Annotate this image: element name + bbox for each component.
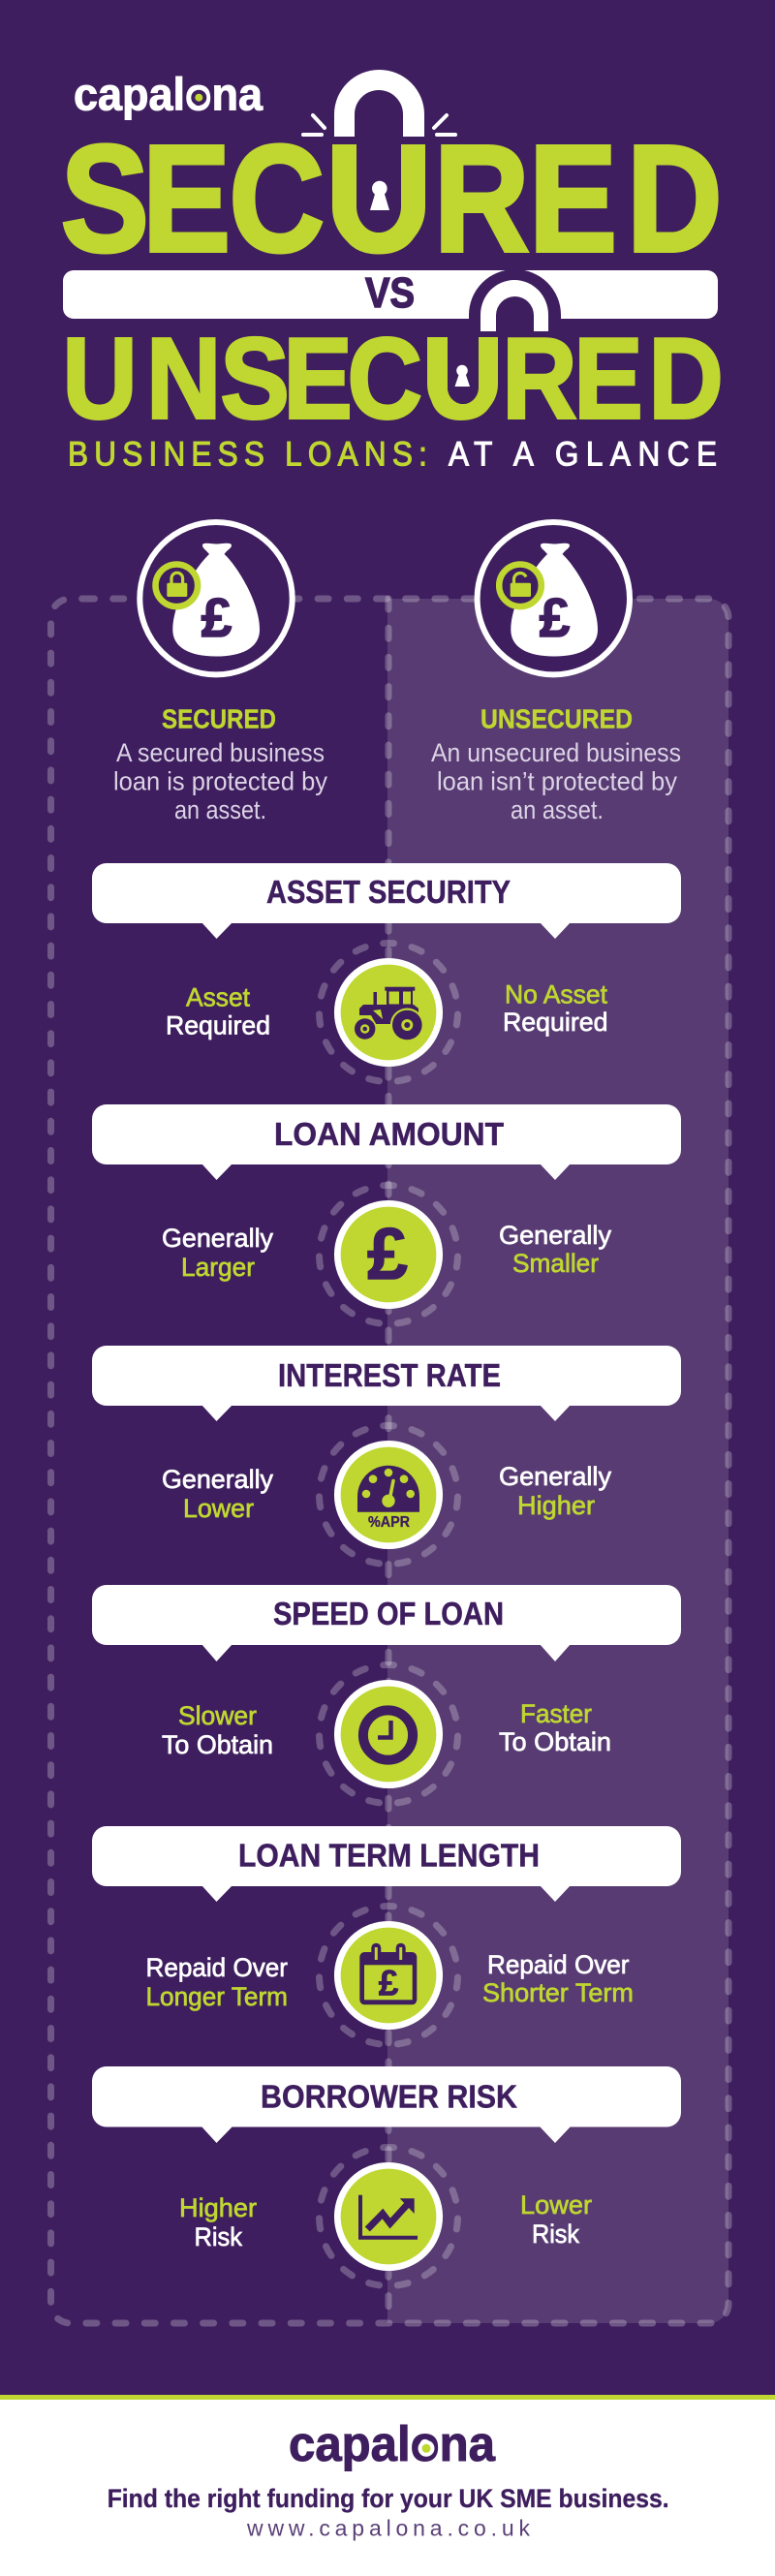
value: slower to obtain: To Obtain <box>162 1730 273 1759</box>
value: generally lower <box>162 1465 273 1523</box>
subtitle: BUSINESS LOANS: <box>68 436 427 474</box>
banner: loan amount <box>92 1104 681 1180</box>
banner: borrower risk: BORROWER RISK <box>261 2079 517 2115</box>
description: secured: A secured business <box>116 738 325 767</box>
banner: speed of loan: SPEED OF LOAN <box>273 1596 504 1631</box>
banner: asset security: ASSET SECURITY <box>266 874 511 910</box>
VS bar <box>63 269 718 320</box>
row: loan term length <box>92 1826 681 2044</box>
title: UNSECURED: UNSECURED <box>62 314 724 443</box>
value: higher risk: Higher <box>179 2193 257 2222</box>
row: speed of loan <box>92 1585 681 1804</box>
row: interest rate <box>92 1346 681 1564</box>
description: secured: an asset. <box>174 795 266 824</box>
padlock body on the U of UNSECURED <box>427 334 498 419</box>
icon: secured money bag: £ <box>202 587 232 649</box>
row: loan amount <box>92 1104 681 1323</box>
icon: closed shackle with sparks <box>303 70 455 137</box>
dashed comparison frame <box>50 599 728 2323</box>
icon: calendar <box>320 1907 457 2044</box>
value: generally smaller: Smaller <box>512 1249 599 1278</box>
value: faster to obtain: Faster <box>520 1699 592 1728</box>
description: secured <box>113 738 327 824</box>
banner: loan term length: LOAN TERM LENGTH <box>238 1837 540 1874</box>
value: lower risk <box>520 2190 592 2249</box>
value: generally lower: Generally <box>162 1465 273 1494</box>
value: generally larger: Generally <box>162 1224 273 1253</box>
icon: tractor <box>320 944 457 1081</box>
icon: pound: £ <box>367 1213 408 1294</box>
icon: secured money bag <box>140 522 293 674</box>
padlock body on the U of SECURED <box>332 141 425 254</box>
description: secured: loan is protected by <box>113 767 327 796</box>
banner: interest rate: INTEREST RATE <box>278 1357 501 1393</box>
value: higher risk <box>179 2193 257 2251</box>
value: repaid over longer term <box>145 1953 288 2011</box>
value: no asset required: Required <box>503 1008 608 1037</box>
value: generally higher: Higher <box>517 1491 595 1520</box>
banner: asset security <box>92 863 681 939</box>
icon: APR gauge <box>320 1426 457 1564</box>
description: unsecured: an asset. <box>511 795 604 824</box>
icon: open shackle <box>480 280 548 331</box>
value: generally lower: Lower <box>183 1494 254 1523</box>
lime divider <box>0 2395 775 2400</box>
icon: calendar: £ <box>379 1963 399 2002</box>
icon: unsecured money bag: £ <box>540 587 571 649</box>
value: generally higher <box>499 1462 611 1520</box>
header <box>61 68 724 474</box>
icon: rising chart <box>320 2147 457 2286</box>
icon: clock <box>320 1664 457 1804</box>
value: generally larger: Larger <box>181 1253 255 1282</box>
value: repaid over shorter term: Repaid Over <box>487 1950 630 1979</box>
value: no asset required: No Asset <box>505 980 607 1009</box>
value: generally larger <box>162 1224 273 1282</box>
value: generally smaller <box>499 1221 611 1278</box>
panel: secured intro <box>113 522 327 824</box>
value: lower risk: Lower <box>520 2190 592 2219</box>
value: repaid over longer term: Longer Term <box>145 1982 288 2011</box>
title: SECURED: SECURED <box>61 114 723 284</box>
value: repaid over longer term: Repaid Over <box>145 1953 288 1982</box>
icon: APR gauge: %APR <box>368 1514 410 1531</box>
value: generally smaller: Generally <box>499 1221 611 1250</box>
description: unsecured: An unsecured business <box>431 738 681 767</box>
value: slower to obtain: Slower <box>178 1701 257 1730</box>
value: lower risk: Risk <box>532 2219 579 2249</box>
logo: capalona white: capalona <box>74 68 264 120</box>
website: www.capalona.co.uk <box>246 2516 531 2541</box>
heading: SECURED: SECURED <box>162 703 276 734</box>
VS bar: VS <box>365 269 415 317</box>
value: asset required <box>166 982 270 1040</box>
value: generally higher: Generally <box>499 1462 611 1491</box>
banner: borrower risk <box>92 2066 681 2143</box>
banner: interest rate <box>92 1346 681 1421</box>
banner: speed of loan <box>92 1585 681 1661</box>
value: slower to obtain <box>162 1701 273 1759</box>
value: faster to obtain <box>499 1699 611 1756</box>
value: higher risk: Risk <box>194 2222 242 2251</box>
logo: capalona purple: capalona <box>289 2416 496 2471</box>
description: unsecured <box>431 738 681 824</box>
subtitle <box>68 436 717 474</box>
icon: unsecured money bag <box>478 522 630 674</box>
value: repaid over shorter term <box>482 1950 634 2007</box>
value: faster to obtain: To Obtain <box>499 1727 611 1756</box>
banner: loan term length <box>92 1826 681 1902</box>
panel: unsecured intro <box>431 522 681 824</box>
value: repaid over shorter term: Shorter Term <box>482 1978 634 2007</box>
subtitle: AT A GLANCE <box>449 436 717 474</box>
icon: pound <box>320 1186 457 1323</box>
value: asset required: Asset <box>186 982 250 1011</box>
row: borrower risk <box>92 2066 681 2286</box>
description: unsecured: loan isn’t protected by <box>437 767 677 796</box>
value: no asset required <box>503 980 608 1037</box>
footer <box>0 2395 775 2576</box>
row: asset security <box>92 863 681 1081</box>
banner: loan amount: LOAN AMOUNT <box>274 1116 504 1152</box>
heading: UNSECURED: UNSECURED <box>480 703 633 734</box>
panel: unsecured column shading <box>388 599 728 2323</box>
value: asset required: Required <box>166 1011 270 1040</box>
tagline: Find the right funding for your UK SME business. <box>108 2484 669 2513</box>
footer background <box>0 2395 775 2576</box>
